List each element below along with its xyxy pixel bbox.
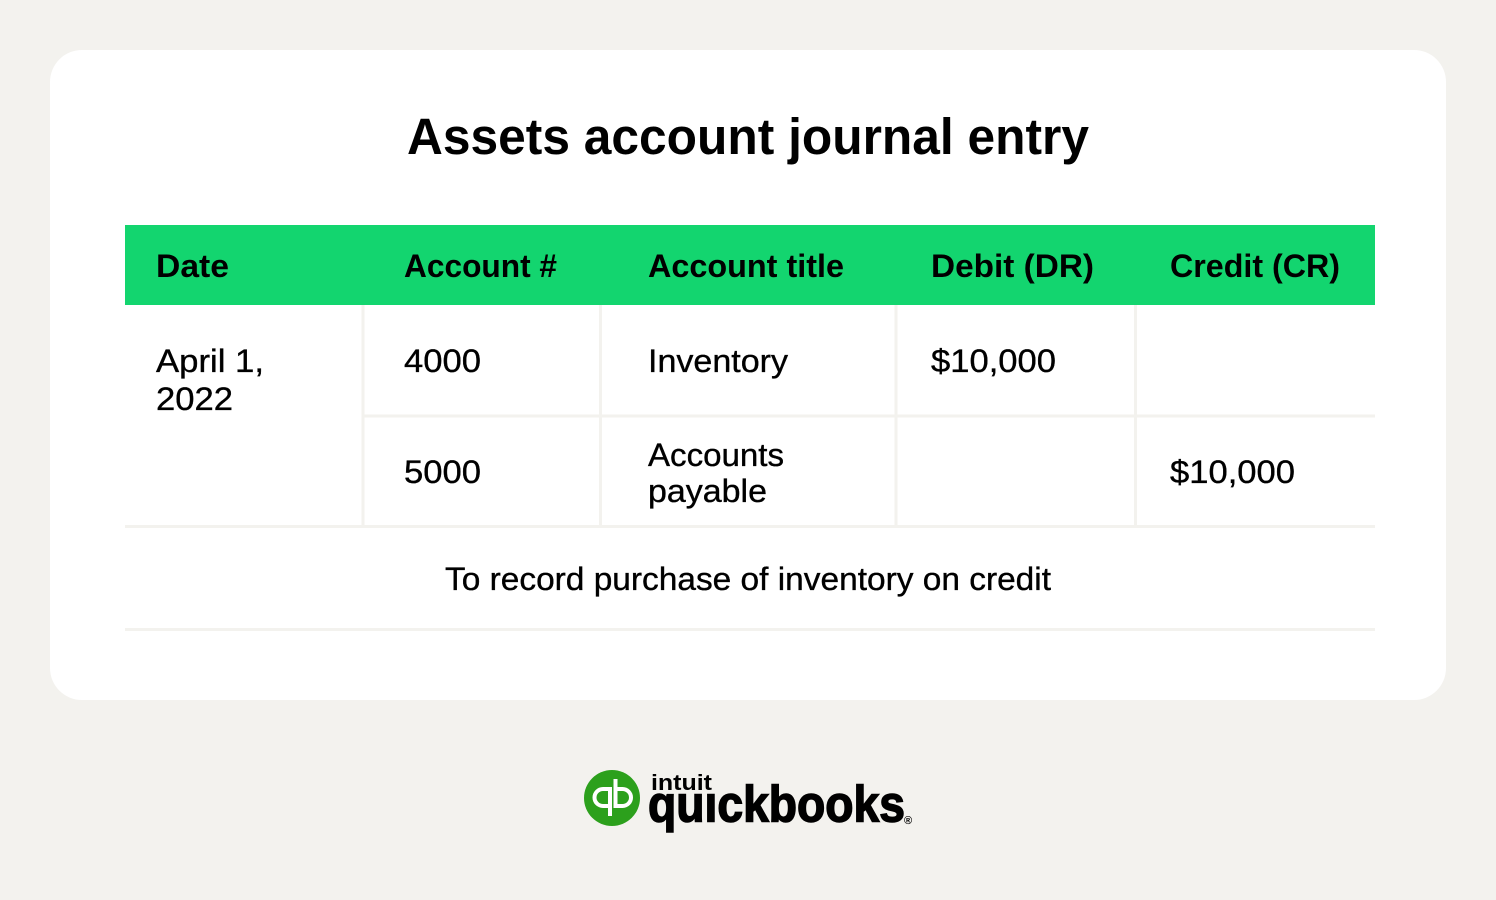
wordmark: intuit: intuit xyxy=(651,770,713,795)
cell: date: April 1, xyxy=(156,343,264,379)
header: Account #: Account # xyxy=(404,248,557,284)
header: Date: Date xyxy=(156,248,229,284)
cell: Accounts payable: payable xyxy=(648,473,767,509)
registered mark: ® xyxy=(904,815,912,827)
title: Assets account journal entry xyxy=(407,108,1090,165)
description row: To record purchase of inventory on credit xyxy=(445,561,1051,597)
logo: Intuit QuickBooks xyxy=(584,768,912,832)
icon: QuickBooks circle xyxy=(584,770,640,826)
cell: account number 4000: 4000 xyxy=(404,343,481,379)
cell: Inventory: Inventory xyxy=(648,343,788,379)
header: Credit (CR): Credit (CR) xyxy=(1170,248,1340,284)
cell: account number 5000: 5000 xyxy=(404,454,481,490)
header: Account title: Account title xyxy=(648,248,844,284)
cell: credit amount: $10,000 xyxy=(1170,454,1295,490)
panel: journal entry card xyxy=(50,50,1446,700)
wordmark: quickbooks: quickbooks xyxy=(648,776,905,832)
table header row xyxy=(125,225,1375,305)
header: Debit (DR): Debit (DR) xyxy=(931,248,1094,284)
cell: date: 2022 xyxy=(156,381,233,417)
cell: Accounts payable: Accounts xyxy=(648,437,784,473)
cell: debit amount: $10,000 xyxy=(931,343,1056,379)
